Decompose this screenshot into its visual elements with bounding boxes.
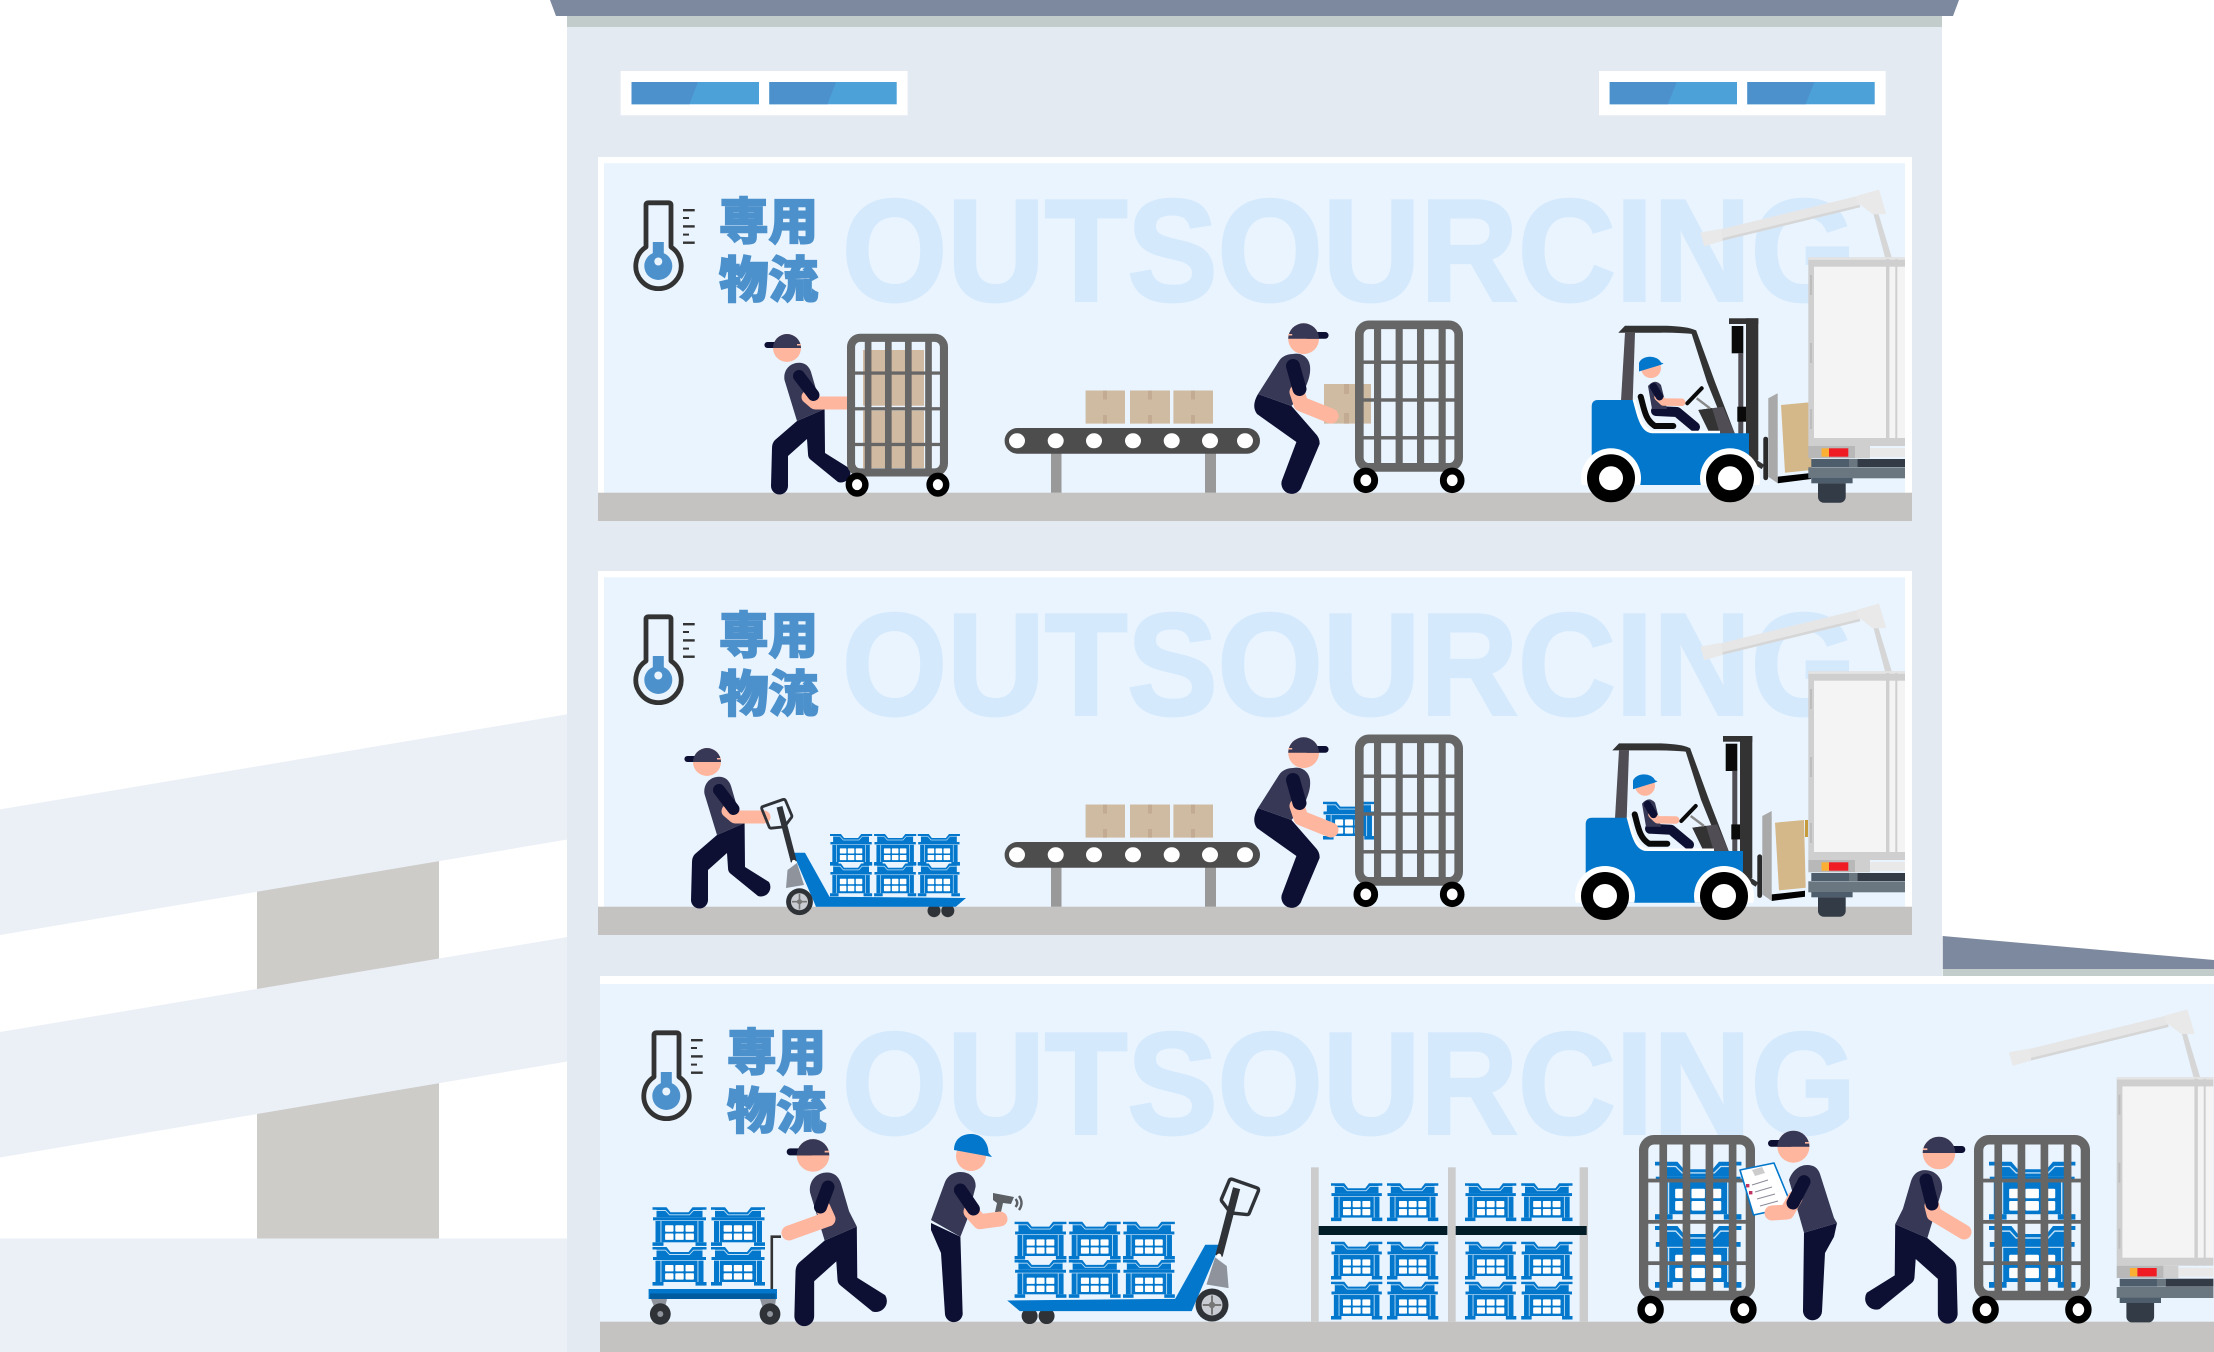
heading: 物流 <box>719 254 818 308</box>
box tape <box>1805 820 1808 837</box>
forklift <box>1575 736 1806 926</box>
heading: 専用 <box>719 609 818 664</box>
storage rack with crates <box>1311 1167 1588 1322</box>
pallet jack with crates <box>762 799 966 917</box>
heading <box>719 195 818 308</box>
panel: floor 2 <box>598 571 1912 935</box>
conveyor with boxes <box>1005 804 1260 907</box>
heading: 専用 <box>727 1026 826 1081</box>
watermark text: OUTSOURCING <box>842 1002 1856 1164</box>
panel: floor 1 <box>598 157 1912 521</box>
heading: 物流 <box>719 668 818 722</box>
worker with clipboard <box>1740 1131 1837 1320</box>
worker pulling pallet jack <box>684 748 770 908</box>
building wall <box>567 16 1942 1352</box>
lower roof, right annex <box>1943 936 2214 976</box>
watermark text: OUTSOURCING <box>842 584 1856 746</box>
icon: thermometer <box>644 1033 703 1119</box>
icon: thermometer <box>636 617 695 703</box>
worker crouching <box>1254 737 1331 908</box>
hand cart with crates <box>649 1207 781 1325</box>
background: ramps and pillars <box>0 714 568 1352</box>
window right <box>1599 71 1886 115</box>
heading: 物流 <box>727 1084 826 1140</box>
conveyor with boxes <box>1005 390 1260 493</box>
worker with scanner <box>931 1134 1022 1322</box>
heading <box>719 609 818 722</box>
roll cage with boxes <box>849 336 946 493</box>
crate beside cage <box>1323 802 1375 840</box>
floor 1 room <box>598 157 1912 521</box>
roll cage with crates <box>1976 1137 2088 1320</box>
worker pushing cage <box>1865 1137 1965 1324</box>
worker pushing cart <box>787 1139 887 1326</box>
icon: thermometer <box>636 203 695 289</box>
truck <box>1702 605 1905 917</box>
floor 3 room <box>600 976 2214 1352</box>
heading <box>727 1026 826 1140</box>
roof <box>550 0 1959 27</box>
roll cage with crates <box>1641 1137 1753 1320</box>
truck <box>2010 1010 2213 1322</box>
window left <box>621 71 908 115</box>
roll cage <box>1357 737 1461 904</box>
panel: floor 3 <box>600 976 2214 1352</box>
floor 2 room <box>598 571 1912 935</box>
truck <box>1702 191 1905 503</box>
watermark text: OUTSOURCING <box>842 170 1856 332</box>
worker crouching <box>1254 323 1331 494</box>
pallet jack with crates <box>1007 1179 1259 1324</box>
heading: 専用 <box>719 195 818 250</box>
box beside cage <box>1324 384 1371 424</box>
roll cage <box>1357 323 1461 490</box>
worker pushing cage <box>764 334 850 494</box>
forklift <box>1581 318 1812 508</box>
